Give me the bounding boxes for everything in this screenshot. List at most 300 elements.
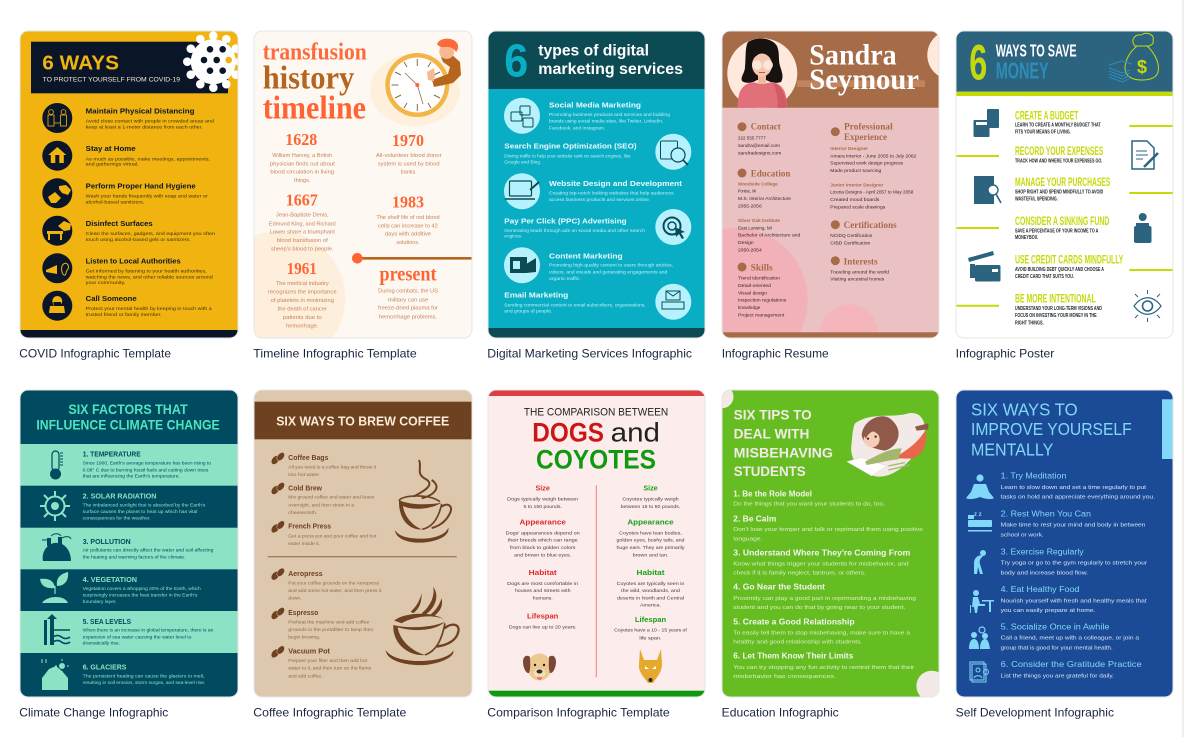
item: Sea Levels: expansion of sea water causing the water level to <box>83 634 192 639</box>
item: Record Your Expenses: RECORD YOUR EXPENSES <box>1015 146 1103 158</box>
item: Eat Healthy Food: 4. Eat Healthy Food <box>1001 585 1079 594</box>
entry: 1628: 1628 <box>285 130 317 149</box>
item: Espresso: grounds to the portafilter to tamp then <box>288 627 374 632</box>
scrollbar track <box>1182 0 1184 737</box>
item: Sea Levels: dramatically rise. <box>83 640 120 645</box>
title band: SIX WAYS TO BREW COFFEE <box>276 413 450 428</box>
section: Skills: Detail-oriented <box>738 283 771 288</box>
item: Use Credit Cards Mindfully: AVOID BUILDING DEBT QUICKLY AND CHOOSE A <box>1015 267 1104 273</box>
item: PPC <box>504 209 691 245</box>
item: Consider a Sinking Fund: CONSIDER A SINKING FUND <box>1015 216 1109 228</box>
item: Temperature: 1. TEMPERATURE <box>83 452 141 459</box>
title box: 6 WAYS <box>42 52 119 74</box>
item: Pollution: 3. POLLUTION <box>83 539 131 546</box>
item: Solar Radiation: The imbalanced sunlight that is absorbed by the Earth's <box>83 502 206 507</box>
item: Social Media Marketing: Social Media Marketing <box>549 101 641 110</box>
item: Manage Your Purchases: MANAGE YOUR PURCHASES <box>1015 177 1110 189</box>
illustration: girl reading <box>847 413 928 477</box>
tip 3 <box>733 549 910 576</box>
entry: 1970 <box>376 135 442 174</box>
item: Cold Brew: Mix ground coffee and water and leave <box>288 495 375 500</box>
title <box>734 408 833 479</box>
entry: 1961: of platelets in minimizing <box>271 298 334 304</box>
header <box>722 32 938 108</box>
section: Education: 2050-2054 <box>738 247 762 252</box>
item: Create a Budget: CREATE A BUDGET <box>1015 110 1078 122</box>
title: MENTALLY <box>971 439 1054 459</box>
item: Vacuum Pot: water to it, and then turn on the flame <box>288 666 372 671</box>
item: Glaciers: resulting in soil erosion, storm surges, and sea-level rise. <box>83 680 205 685</box>
item: Maintain Physical Distancing: Maintain Physical Distancing <box>86 106 195 115</box>
item: Socialize Once in Awhile: group that is good for your mental health. <box>1001 645 1113 651</box>
panel: education card <box>710 385 947 701</box>
section: Interests: Traveling around the world <box>830 269 889 274</box>
title: DEAL WITH <box>734 426 809 441</box>
tip 2: 2. Be Calm <box>733 514 776 523</box>
item: Cold Brew: cheesecloth. <box>288 510 317 515</box>
item: Social Media Marketing: Promoting business products and services and building <box>549 112 670 117</box>
column: coyotes: the wild, woodlands, and <box>621 588 680 594</box>
item: Stay at Home <box>42 141 210 171</box>
item: Website Design: Website Design and Development <box>549 179 683 188</box>
column: coyotes: Size <box>643 486 658 493</box>
item: Sea Levels <box>44 614 214 645</box>
column: coyotes: Appearance <box>627 520 674 527</box>
item: Pollution <box>42 534 214 561</box>
icon: virus <box>183 31 244 92</box>
item: Glaciers <box>42 659 205 690</box>
entry: present <box>378 269 438 320</box>
item: Aeropress: down. <box>288 596 302 601</box>
item: Coffee Bags: into hot water. <box>288 472 320 477</box>
title: transfusion <box>263 39 367 65</box>
item: Consider the Gratitude Practice: List the things you are grateful for daily. <box>1001 673 1114 679</box>
section: Professional Experience <box>830 122 917 209</box>
item: Content Marketing <box>504 247 673 283</box>
section: Professional Experience: Interior Designer <box>830 146 868 151</box>
entry: 1961: hemorrhage. <box>286 323 318 329</box>
item: Consider a Sinking Fund <box>1015 213 1152 243</box>
section: Contact: Contact <box>751 122 781 132</box>
item: Listen to Local Authorities: your community. <box>86 280 125 285</box>
title <box>524 407 668 475</box>
item: Create a Budget: FITS YOUR MEANS OF LIVING. <box>1015 130 1071 136</box>
entry: present: freeze-dried plasma for <box>378 306 438 312</box>
item: Stay at Home: Stay at Home <box>86 144 136 153</box>
entry: 1961: 1961 <box>287 259 317 278</box>
item: Sea Levels: 5. SEA LEVELS <box>83 619 131 626</box>
entry: 1628 <box>270 134 335 183</box>
section: Professional Experience: Liceria Designs - April 2057 to May 2058 <box>830 190 914 195</box>
item: Solar Radiation <box>40 491 206 521</box>
item: Espresso: Espresso <box>288 610 318 617</box>
tip 5: healthy and good relationship with students. <box>733 640 862 646</box>
panel: coffee card <box>254 390 472 697</box>
title: STUDENTS <box>734 464 806 479</box>
item: Listen to Local Authorities: watching the news, and other reliable sources around <box>86 275 213 280</box>
title: DOGS <box>532 417 604 447</box>
title <box>971 400 1132 459</box>
item: Content Marketing: organic traffic. <box>549 276 581 281</box>
item: Aeropress: Put your coffee grounds on the Aeropress <box>288 580 380 585</box>
header <box>956 31 1173 96</box>
item: Social Media Marketing: Facebook, and Instagram. <box>549 126 605 131</box>
item: Stay at Home: As much as possible, make meetings, appointments, <box>86 156 210 161</box>
title <box>263 42 366 119</box>
item: Website Design: Creating top-notch looking websites that help audiences <box>549 191 674 196</box>
item: Record Your Expenses: TRACK HOW AND WHERE YOUR EXPENSES GO. <box>1015 159 1103 165</box>
section: Education: Education <box>751 169 790 179</box>
item: Use Credit Cards Mindfully <box>968 251 1123 282</box>
title box: TO PROTECT YOURSELF FROM COVID-19 <box>43 76 180 83</box>
item: Cold Brew <box>270 481 375 515</box>
item: French Press <box>270 519 377 546</box>
entry: 1983: The shelf life of red blood <box>376 215 440 221</box>
section: Contact: sandra@email.com <box>738 143 780 148</box>
item: PPC: engines. <box>504 234 522 239</box>
section: Professional Experience: Supervised work design progress <box>830 161 904 166</box>
item: Pollution: the heating and warming factors of the climate. <box>83 554 185 559</box>
item: Cold Brew: Cold Brew <box>288 486 323 493</box>
entry: 1667: Lower share a triumphant <box>270 230 335 236</box>
item: Content Marketing: Content Marketing <box>549 251 623 260</box>
entry: 1970: All-volunteer blood donor <box>376 153 442 159</box>
entry: 1970: 1970 <box>392 131 424 150</box>
item: Coffee Bags: Coffee Bags <box>288 455 328 462</box>
divider <box>268 556 457 558</box>
entry: 1961 <box>268 259 337 329</box>
column: coyotes: Coyotes are typically seen in <box>617 581 685 587</box>
caption: COVID: COVID Infographic Template <box>19 346 171 360</box>
item: French Press: Get a press pot and pour coffee and hot <box>288 533 377 538</box>
item: Be More Intentional: FOCUS ON INVESTING YOUR MONEY IN THE <box>1015 313 1097 319</box>
icon: money bag <box>1125 33 1158 80</box>
entry: 1667 <box>269 190 336 253</box>
entry: 1983: days with additive <box>385 232 431 238</box>
item: Rest When You Can: z z <box>974 512 982 518</box>
entry: 1983 <box>376 196 440 244</box>
section: Professional Experience: Made product sourcing <box>830 168 882 173</box>
section: Professional Experience: Amara Interior - June 2055 to July 2062 <box>830 153 917 158</box>
item: Temperature <box>50 451 211 480</box>
illustration: clock with man <box>370 39 461 126</box>
item: Be More Intentional <box>1015 290 1161 326</box>
item: Temperature: that are influencing the Earth's temperature. <box>83 473 180 478</box>
entry: present: hemorrhage problems. <box>379 314 437 320</box>
item: Maintain Physical Distancing: Avoid close contact with people in crowded areas and <box>86 119 214 124</box>
item: Coffee Bags <box>270 451 377 477</box>
section: Skills: Project management <box>738 312 785 317</box>
column: dogs: Dogs are most comfortable in <box>507 581 579 587</box>
item: Email Marketing: Email Marketing <box>504 291 569 300</box>
item: SEO: Google and Bing. <box>504 160 541 165</box>
item: Disinfect Surfaces: Disinfect Surfaces <box>86 219 153 228</box>
title: SIX FACTORS THAT <box>68 402 188 417</box>
tip 3: 3. Understand Where They're Coming From <box>733 549 910 558</box>
column: coyotes: Lifespan <box>635 617 666 624</box>
item: Vacuum Pot: and add coffee. <box>288 673 323 678</box>
item: Try Meditation <box>966 472 1155 501</box>
section: Contact: 222 555 7777 <box>738 136 766 141</box>
item: Glaciers: 6. GLACIERS <box>83 664 127 671</box>
item: Maintain Physical Distancing <box>42 103 214 133</box>
icon: coffee cup with saucer <box>386 587 459 665</box>
entry: 1983: 1983 <box>392 193 424 212</box>
header: WAYS TO SAVE <box>996 41 1077 61</box>
item: Perform Proper Hand Hygiene: Perform Proper Hand Hygiene <box>86 182 196 191</box>
item: Socialize Once in Awhile: Call a friend, meet up with a colleague, or join a <box>1001 636 1139 642</box>
entry: 1667: blood transfusion of <box>277 238 329 244</box>
caption: climate: Climate Change Infographic <box>19 706 168 720</box>
item: Coffee Bags: All you need is a coffee bag and throw it <box>288 464 377 469</box>
column: coyotes: huge ears. They are primarily <box>616 545 685 551</box>
item: Try Meditation: Learn to slow down and set a time regularly to put <box>1001 485 1147 491</box>
caption: education: Education Infographic <box>722 706 839 720</box>
section: Education: Woodside College <box>738 182 778 187</box>
entry: 1983: solutions. <box>396 240 420 246</box>
section: Contact <box>738 122 781 156</box>
entry: 1628: blood circulation in living <box>270 170 334 176</box>
title <box>36 402 220 432</box>
header: MONEY <box>996 57 1049 83</box>
panel: digital marketing card <box>488 31 705 338</box>
column: dogs: Size <box>536 486 550 493</box>
item: Vegetation: 4. VEGETATION <box>83 577 137 584</box>
item: Solar Radiation: consequences for the weather. <box>83 516 151 521</box>
item: Solar Radiation: surface causes the planet to heat up which has vital <box>83 509 197 514</box>
item: Espresso: Preheat the machine and add coffee <box>288 619 370 624</box>
tip 6: misbehavior has consequences. <box>733 674 836 680</box>
title: timeline <box>263 90 366 126</box>
title: types of digital <box>538 43 649 60</box>
tip 5: To easily tell them to stop misbehaving, make sure to have a <box>733 631 910 637</box>
title: SIX TIPS TO <box>734 408 812 423</box>
item: Email Marketing <box>504 284 691 320</box>
title: IMPROVE YOURSELF <box>971 419 1132 439</box>
item: Listen to Local Authorities: Get informed by listening to your health authorities, <box>86 269 207 274</box>
column: coyotes: deserts in North and Central <box>617 595 684 601</box>
title <box>506 44 682 78</box>
tip 3: check if it is family neglect, tantrum, or others. <box>733 570 866 576</box>
item: Exercise Regularly: body and increase blood flow. <box>1001 570 1088 576</box>
tip 1: Do the things that you want your students to do, too. <box>733 502 885 508</box>
icon: money bag: $ <box>1137 57 1147 77</box>
section: Skills <box>738 262 787 317</box>
panel: self development card <box>956 390 1173 697</box>
entry: 1667: sheep's blood to people. <box>271 247 334 253</box>
item: Perform Proper Hand Hygiene <box>42 178 208 208</box>
item: Be More Intentional: RIGHT THINGS. <box>1015 320 1044 326</box>
tip 2 <box>733 514 923 542</box>
item: Espresso: begin brewing. <box>288 635 320 640</box>
item: Vegetation <box>40 572 201 604</box>
item: Vacuum Pot: Prepare your filter and then add hot <box>288 658 368 663</box>
item: Content Marketing: Promoting high-quality content to users through articles, <box>549 263 673 268</box>
item: Rest When You Can: Make time to rest your mind and body in between <box>1001 523 1145 529</box>
item: Consider a Sinking Fund: SAVE A PERCENTAGE OF YOUR INCOME TO A <box>1015 228 1098 234</box>
panel: dogs and coyotes comparison card <box>488 389 705 698</box>
item: Email Marketing: and groups of people. <box>504 309 552 314</box>
tip 4: Proximity can play a good part in reprimanding a misbehaving <box>733 596 916 602</box>
section: Skills: knowledge <box>738 305 761 310</box>
section: Education: East Lansing, MI <box>738 225 772 230</box>
entry: 1628: things. <box>294 178 310 184</box>
entry: 1628: William Harvey, a British <box>272 153 333 159</box>
item: Manage Your Purchases <box>974 176 1110 204</box>
icon: avatar <box>727 38 797 108</box>
column: dogs: their breeds which can range <box>508 538 578 544</box>
item: Consider the Gratitude Practice <box>970 660 1142 682</box>
column: coyotes: Coyotes have a 10 - 15 years of <box>614 628 688 634</box>
item: Cold Brew: overnight, and then strain in a <box>288 502 354 507</box>
entry: 1970: banks. <box>401 170 417 176</box>
item: Stay at Home: and gatherings virtual. <box>86 162 139 167</box>
item: Temperature: 0.08° C due to burning fossil fuels and cutting down trees <box>83 467 209 472</box>
item: Vegetation: boundary layer. <box>83 599 117 604</box>
item: Exercise Regularly: 3. Exercise Regularly <box>1001 547 1084 556</box>
item: Perform Proper Hand Hygiene: Wash your hands frequently with soap and water or <box>86 194 208 199</box>
item: Listen to Local Authorities: Listen to Local Authorities <box>86 256 181 265</box>
item: Vacuum Pot <box>270 644 372 678</box>
section: Interests <box>830 256 889 282</box>
title: THE COMPARISON BETWEEN <box>524 407 668 419</box>
section: Skills: Skills <box>751 263 773 273</box>
item: Call Someone <box>42 291 212 321</box>
section: Skills: Inspection regulations <box>738 298 787 303</box>
tip 2: Don't lose your temper and talk or reprimand them using positive <box>733 527 923 533</box>
item: Solar Radiation: 2. SOLAR RADIATION <box>83 494 156 501</box>
column: dogs: Dogs typically weigh between <box>507 497 579 503</box>
column: dogs: 5 to 150 pounds. <box>524 504 562 510</box>
section: Professional Experience: Created mood boards <box>830 197 880 202</box>
entry: 1961: recognizes the importance <box>268 290 337 296</box>
section: Certifications: CIBD Certification <box>830 240 871 245</box>
entry: 1667: Jean-Baptiste Denis, <box>276 213 329 219</box>
column: dogs: Habitat <box>529 570 557 577</box>
item: Exercise Regularly <box>974 547 1147 576</box>
section: Certifications <box>830 220 897 245</box>
item: Record Your Expenses <box>1015 141 1158 169</box>
item: Website Design <box>504 173 683 209</box>
header: 6 <box>969 34 987 90</box>
item: Social Media Marketing <box>504 98 670 134</box>
entry: present: present <box>380 264 437 286</box>
icon: money stack <box>1109 61 1132 82</box>
section: Interests: Interests <box>844 256 878 266</box>
title: marketing services <box>538 61 683 78</box>
icon: dog <box>523 654 556 680</box>
column: coyotes: between 15 to 50 pounds. <box>621 504 680 510</box>
item: Vacuum Pot: Vacuum Pot <box>288 648 331 655</box>
item: Disinfect Surfaces <box>42 216 215 246</box>
tip 2: language. <box>733 536 762 542</box>
title band <box>254 402 472 439</box>
item: Call Someone: trusted friend or family member. <box>86 312 162 317</box>
section: Education <box>738 168 801 252</box>
entry: 1628: physician finds out about <box>270 161 336 167</box>
item: Eat Healthy Food: you can easily prepare at home. <box>1001 608 1095 614</box>
section: Education: M.S. Interior Architecture <box>738 196 791 201</box>
item: Create a Budget: LEARN TO CREATE A MONTHLY BUDGET THAT <box>1015 123 1101 129</box>
section: Interests: Visiting ancestral homes <box>830 277 885 282</box>
panel: climate change card <box>20 390 238 697</box>
title: SIX WAYS TO <box>971 400 1078 420</box>
section: Education: Design <box>738 240 754 245</box>
item: Exercise Regularly: Try yoga or go to the gym regularly to stretch your <box>1001 560 1147 566</box>
column: dogs: Dogs' appearances depend on <box>506 530 580 536</box>
item: Glaciers: The persistent heating can cause the glaciers to melt, <box>83 673 205 678</box>
section: Education: 2055-2056 <box>738 203 762 208</box>
column: dogs <box>506 486 580 630</box>
item: Disinfect Surfaces: Clean the surfaces, gadgets, and equipment you often <box>86 231 215 236</box>
column: coyotes: Coyotes typically weigh <box>622 497 679 503</box>
section: Contact: sandradesigns.com <box>738 151 781 156</box>
item: Content Marketing: videos, and visuals and generating engagements and <box>549 269 668 274</box>
caption: coffee: Coffee Infographic Template <box>253 706 407 720</box>
item: Be More Intentional: BE MORE INTENTIONAL <box>1015 294 1096 306</box>
item: Create a Budget <box>974 109 1101 137</box>
caption: digital marketing: Digital Marketing Services Infographic <box>487 346 692 360</box>
section: Education: Bachelor of Architecture and <box>738 233 801 238</box>
item: PPC: Generating leads through ads on social media and other search <box>504 228 645 233</box>
title: COYOTES <box>536 445 656 475</box>
item: French Press: water inside it. <box>288 541 320 546</box>
item: Try Meditation: tasks on hold and appreciate everything around you. <box>1001 495 1155 501</box>
section: Professional Experience: Junior Interior Designer <box>830 182 884 187</box>
title: INFLUENCE CLIMATE CHANGE <box>36 417 220 432</box>
item: Aeropress: and add some hot water, and then press it <box>288 588 382 593</box>
item: Perform Proper Hand Hygiene: alcohol-based sanitizers. <box>86 199 144 204</box>
section: Certifications: Certifications <box>844 220 897 230</box>
item: Manage Your Purchases: WASTEFUL SPENDING. <box>1015 196 1058 202</box>
item: Vegetation: Vegetation covers a whopping 20% of the Earth, which <box>83 586 201 591</box>
item: Consider the Gratitude Practice: 6. Consider the Gratitude Practice <box>1001 660 1142 669</box>
column: coyotes: Habitat <box>636 570 665 577</box>
panel: save money poster card <box>956 31 1173 338</box>
column: coyotes: golden eyes, bushy tails, and <box>616 538 685 544</box>
caption: resume: Infographic Resume <box>722 346 829 360</box>
item: Temperature: Since 1900, Earth's average temperature has been rising to <box>83 461 211 466</box>
item: French Press: French Press <box>288 524 331 531</box>
item: Vegetation: surprisingly increases the heat transfer in the Earth's <box>83 593 198 598</box>
item: Consider a Sinking Fund: MONEYBOX. <box>1015 235 1039 241</box>
title: history <box>263 60 355 96</box>
caption: poster: Infographic Poster <box>956 346 1054 360</box>
entry: 1667: 1667 <box>286 190 318 209</box>
item: Call Someone: Protect your mental health by keeping in touch with a <box>86 306 212 311</box>
tip 4 <box>733 582 916 611</box>
column: coyotes: brown and tan. <box>633 552 668 558</box>
caption: self development: Self Development Infographic <box>956 706 1114 720</box>
item: Be More Intentional: UNDERSTAND YOUR LONG-TERM VISIONS AND <box>1015 306 1102 312</box>
item: Rest When You Can: 2. Rest When You Can <box>1001 510 1091 519</box>
item: Maintain Physical Distancing: keep at least a 1-meter distance from each other. <box>86 124 203 129</box>
item: SEO <box>504 134 691 170</box>
header: Sandra <box>809 38 897 71</box>
entry: 1961: patients due to <box>283 315 322 321</box>
item: Try Meditation: 1. Try Meditation <box>1001 472 1066 481</box>
entry: 1961: The medical industry <box>276 281 329 287</box>
icon: steaming coffee cup <box>395 460 451 543</box>
title: and <box>611 417 660 447</box>
section: Professional Experience: Professional <box>844 122 893 132</box>
item: Disinfect Surfaces: touch using alcohol-based gels or sanitizers. <box>86 237 191 242</box>
entry: present: During combats, the US <box>378 289 439 295</box>
column: coyotes: Coyotes have lean bodies, <box>619 530 682 536</box>
caption: comparison: Comparison Infographic Template <box>487 706 670 720</box>
entry: 1970: system is used by blood <box>378 161 440 167</box>
header: Seymour <box>809 63 919 96</box>
